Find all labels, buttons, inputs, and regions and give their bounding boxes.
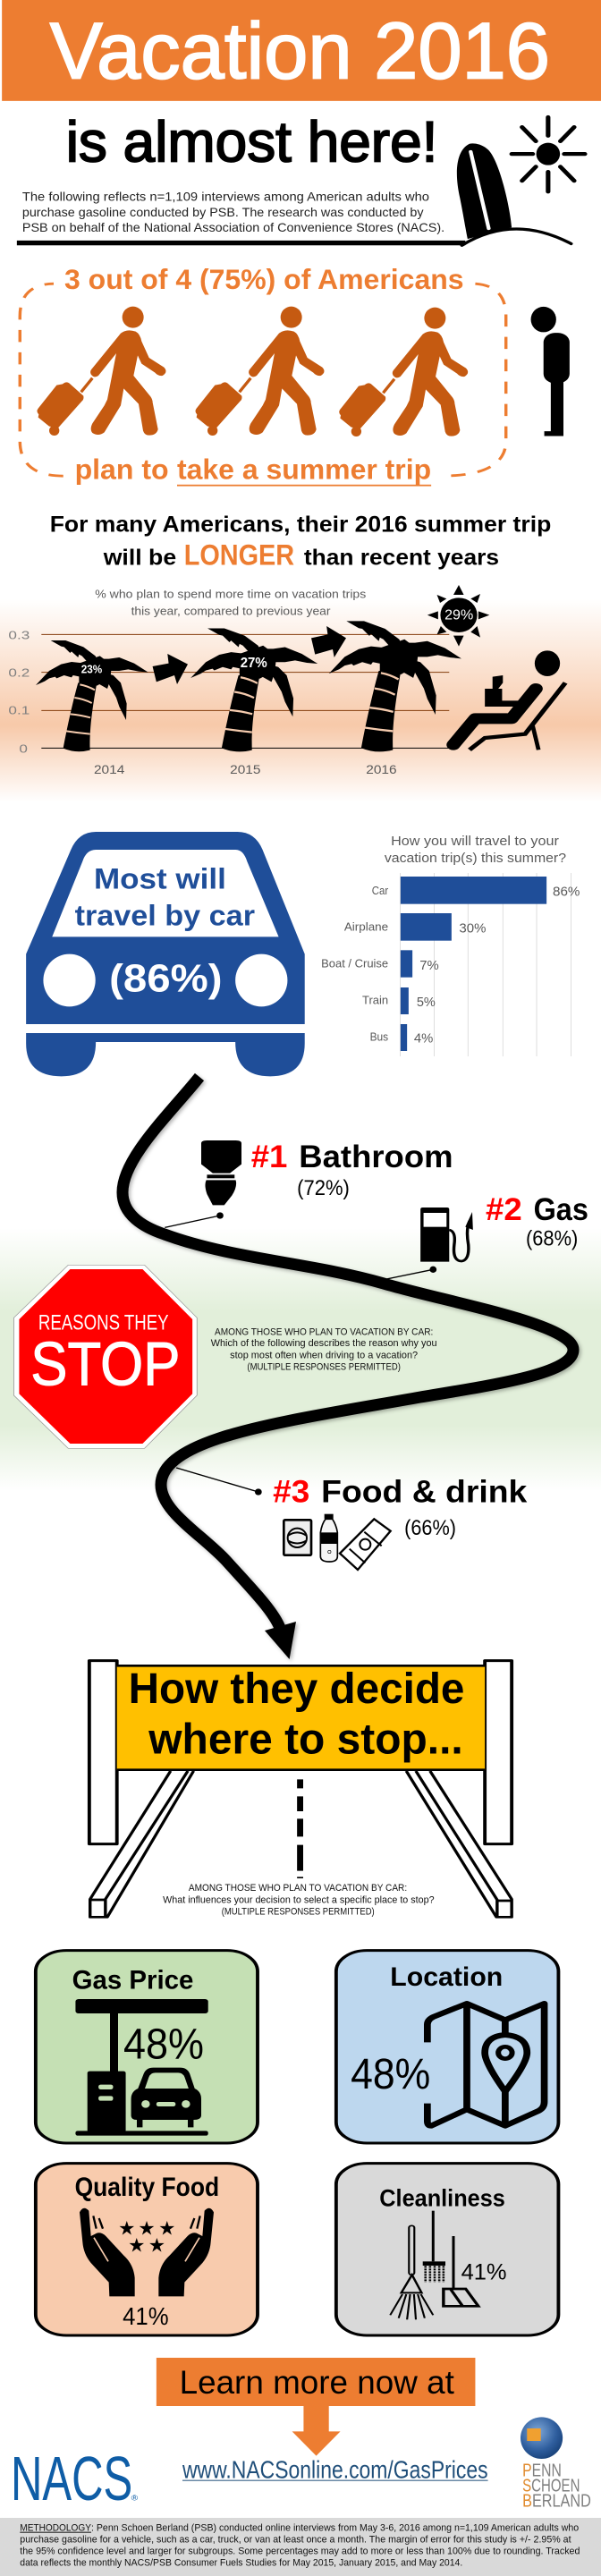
section background: orange gradient [0,599,601,802]
question text: AMONG THOSE WHO PLAN TO VACATION BY CAR: [215,1326,433,1337]
card: location: Location [390,1962,503,1992]
learn more box: Learn more now at [180,2364,454,2402]
panel: stop decision cards [36,1951,558,2335]
x axis labels: 2015 [230,763,260,776]
arrow 2014 to 2015 [153,654,188,684]
reason 3: food and drink [176,1468,528,1570]
x axis labels: 2016 [366,763,397,776]
heading bottom [75,455,431,487]
icon: car [26,832,305,1076]
question text [211,1326,437,1372]
chart title: vacation trip(s) this summer? [385,851,566,865]
icon: hands with stars: ★ [138,2218,156,2240]
call to action [0,2358,601,2576]
card: quality food: Quality Food [75,2173,219,2202]
icon: traveler 1 [37,307,165,436]
icon: hands with stars: ★ [128,2235,145,2257]
chart subtitle: % who plan to spend more time on vacation trips [95,588,367,601]
y axis labels [8,629,30,756]
reason 1: bathroom: (72%) [297,1175,350,1199]
dashed frame [20,284,506,476]
icon: hands with stars [80,2208,214,2296]
icon: broom, brush and dustpan [390,2211,478,2319]
category labels: Car [372,886,388,897]
panel: longer trips [8,513,565,776]
card: gas price: 48% [123,2020,204,2068]
panel: roadblock sign [89,1661,512,1917]
arrow 2015 to 2016 [311,626,346,657]
y axis labels: 0.2 [8,666,30,680]
panel: travel by car [26,832,580,1076]
value labels: 7% [419,958,439,972]
card: location: 48% [351,2050,430,2097]
question text [163,1882,435,1917]
icon: person on lounger [453,650,565,750]
category labels: Airplane [344,921,388,934]
reason 3: food and drink: (66%) [404,1515,456,1539]
palm 2016 [329,621,461,751]
chart subtitle: this year, compared to previous year [131,605,330,618]
sun with 29% [427,585,489,647]
heading bottom: take a summer trip [177,455,431,486]
icon: traveler 3 [339,308,468,436]
chart title [385,834,566,865]
reason 2: gas [379,1191,588,1281]
heading: will be [103,546,176,571]
stop sign: REASONS THEY [38,1310,169,1335]
intro panel [17,109,585,245]
reason 1: bathroom: Bathroom [299,1139,453,1174]
palm 2015 [190,628,317,751]
logo: Penn Schoen Berland: PENN [522,2460,562,2481]
chart: palm tree bars [8,585,489,776]
value labels: 30% [459,921,486,936]
icon: beach ground line [17,241,465,245]
car headline: travel by car [75,900,255,931]
card: cleanliness: 41% [461,2260,507,2284]
road arrow [123,1077,573,1659]
bar chart: travel modes [321,873,580,1056]
reason 1: bathroom: #1 [251,1139,287,1174]
question text: AMONG THOSE WHO PLAN TO VACATION BY CAR: [189,1882,407,1894]
icon: bottle [320,1514,337,1562]
methodology footer [0,2518,601,2576]
car headline [75,863,255,931]
heading bottom: plan to [75,455,169,486]
intro text: The following reflects n=1,109 interviews among American adults who [22,191,429,204]
value labels: 5% [417,995,436,1009]
category labels [321,886,388,1044]
stop sign [13,1265,197,1448]
road center dashes [293,1779,308,1878]
value labels: 4% [414,1031,433,1046]
heading top: 3 out of 4 (75%) of Americans [64,265,464,295]
category labels: Bus [370,1031,388,1044]
header: Vacation 2016 [2,0,601,101]
y axis labels: 0.3 [8,629,30,642]
sun with 29%: 29% [444,606,473,623]
arrow down [292,2406,341,2456]
card: cleanliness: Cleanliness [379,2184,505,2212]
learn more box [157,2358,475,2406]
card: cleanliness [336,2164,558,2335]
reason 3: food and drink: #3 [273,1473,309,1509]
card: quality food: 41% [123,2303,169,2330]
heading: than recent years [304,546,499,571]
sign board: where to stop... [148,1714,463,1763]
question text: stop most often when driving to a vacation? [230,1350,418,1360]
palm 2014 [36,640,148,751]
panel: reasons they stop [13,1139,588,1570]
icon: hands with stars: ★ [158,2218,175,2240]
intro text [22,191,444,235]
icon: hands with stars: ★ [148,2235,165,2257]
intro text: purchase gasoline conducted by PSB. The research was conducted by [22,206,424,220]
heading [50,513,551,572]
heading: LONGER [184,538,294,572]
logo: NACS: ® [131,2494,138,2502]
chart subtitle [95,588,367,618]
reason 1: bathroom [165,1139,453,1227]
icon: map with pin [427,2004,545,2126]
section background: green gradient [0,1228,601,1491]
reason 2: gas: (68%) [526,1226,578,1250]
category labels: Boat / Cruise [321,958,388,970]
methodology footer: data reflects the monthly NACS/PSB Consumer Fuels Studies for May 2015, January 2015, and May 2014. [20,2557,462,2568]
icon: standing person [531,307,570,436]
car stat: (86%) [109,956,223,1000]
panel: 3 out of 4 Americans [20,265,570,487]
barricade legs [90,1771,512,1917]
card: gas price: Gas Price [72,1965,193,1995]
y axis labels: 0 [19,742,28,756]
value labels [414,885,580,1046]
x axis labels: 2014 [94,763,124,776]
question text: (MULTIPLE RESPONSES PERMITTED) [222,1906,375,1917]
x axis labels [94,763,397,776]
value 2015: 27% [241,656,267,671]
icon: gas station [75,1999,208,2136]
icon: snack bag [284,1520,311,1555]
category labels: Train [362,995,388,1007]
stop sign: STOP [30,1330,180,1398]
value labels: 86% [553,885,580,899]
value 2014: 23% [81,662,103,675]
subtitle: is almost here! [66,109,437,174]
icon: sun [512,117,585,191]
sign board: How they decide [129,1664,464,1712]
card: location [336,1951,558,2143]
icon: surfboard and hill [457,143,571,245]
intro text: PSB on behalf of the National Association of Convenience Stores (NACS). [22,221,444,235]
chart title: How you will travel to your [391,834,559,848]
logo: Penn Schoen Berland [521,2417,591,2512]
icon: snack bar [340,1519,391,1570]
y axis labels: 0.1 [8,704,30,717]
methodology footer: METHODOLOGY [20,2522,91,2533]
barricade posts [89,1661,512,1844]
sign board [117,1664,485,1770]
icon: traveler 2 [195,307,324,436]
card: quality food [36,2164,258,2335]
logo: NACS [11,2444,138,2513]
car headline: Most will [94,863,226,894]
reason 3: food and drink: Food & drink [321,1473,528,1509]
reason 2: gas: #2 [486,1191,522,1227]
question text: (MULTIPLE RESPONSES PERMITTED) [247,1361,401,1372]
card: gas price [36,1951,258,2143]
question text: Which of the following describes the reason why you [211,1337,437,1349]
logo: NACS: NACS [11,2444,132,2513]
icon: hands with stars: ★ [118,2218,135,2240]
question text: What influences your decision to select a specific place to stop? [163,1894,435,1905]
